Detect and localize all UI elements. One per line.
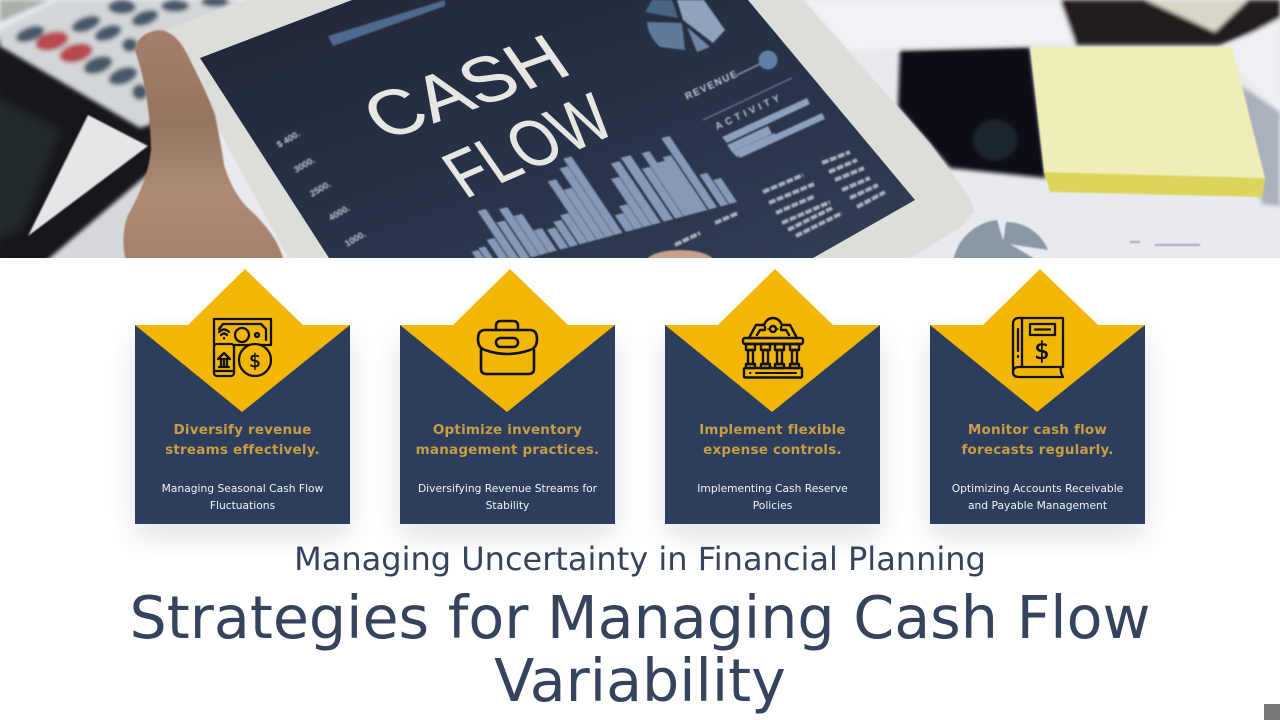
card 3: flexible expense controls [656,269,889,545]
axis labels on tablet: 3000. [292,155,317,175]
card heading: Monitor cash flow [968,422,1107,438]
card subtext: Stability [486,499,529,512]
card subtext [162,482,323,512]
card subtext [418,482,598,512]
card heading: forecasts regularly. [961,442,1114,458]
card subtext: Fluctuations [210,499,275,512]
card subtext: Optimizing Accounts Receivable [952,482,1123,495]
card subtext: Implementing Cash Reserve [697,482,848,495]
icon: ledger book with dollar [1012,316,1064,378]
card heading [961,422,1114,458]
axis labels on tablet: $ 400. [275,129,302,150]
heading FLOW on tablet: FLOW [429,80,627,211]
card heading [699,422,846,458]
title: Strategies for Managing Cash Flow Variability [130,584,1150,715]
card subtext: Diversifying Revenue Streams for [418,482,597,495]
card heading: Diversify revenue [173,422,312,438]
fingertip at bottom of tablet [646,250,714,274]
tablet screen [200,0,915,258]
white wedge object [28,115,148,236]
sticky note [1030,47,1265,197]
icon: ledger book with dollar: $ [1034,337,1050,365]
card heading: expense controls. [703,442,842,458]
icon: money, phone and coin [212,318,272,378]
card subtext [952,482,1123,512]
desk and papers background [0,0,1280,270]
calculator [0,0,240,128]
axis labels on tablet: 2500. [308,179,333,199]
icon: money, phone and coin: $ [249,350,261,372]
mini bars on tablet [703,78,825,158]
subtitle: Managing Uncertainty in Financial Planning [294,540,986,578]
card heading [416,422,599,458]
heading CASH on tablet: CASH [348,21,584,154]
card subtext: Managing Seasonal Cash Flow [162,482,323,495]
card 4: monitor cash flow forecasts [921,269,1154,545]
icon: briefcase [476,320,538,376]
slider on tablet [684,50,778,103]
card subtext: Policies [753,499,792,512]
hero photo: tablet showing cash flow [0,0,1280,258]
card subtext [697,482,848,512]
hand thumb [123,30,284,262]
card heading: Optimize inventory [433,422,582,438]
card 2: optimize inventory [391,269,624,545]
corner square [1264,704,1280,720]
paper pie chart [953,220,1200,262]
axis labels on tablet: 4000. [327,203,352,223]
axis labels on tablet [275,129,368,249]
card subtext: and Payable Management [968,499,1107,512]
axis labels on tablet: 1000. [343,229,368,249]
screen top bar [328,0,445,46]
tablet body [165,0,974,262]
card heading: streams effectively. [165,442,320,458]
icon: bank building [742,316,804,379]
pie chart on tablet [645,0,725,52]
card heading: Implement flexible [699,422,846,438]
slider on tablet: REVENUE [684,69,739,103]
card 1: diversify revenue [126,269,359,545]
bar chart on tablet [433,126,737,270]
card heading: management practices. [416,442,599,458]
card heading [165,422,320,458]
mini bars on tablet: ACTIVITY [714,93,782,133]
text columns on tablet [675,152,885,245]
